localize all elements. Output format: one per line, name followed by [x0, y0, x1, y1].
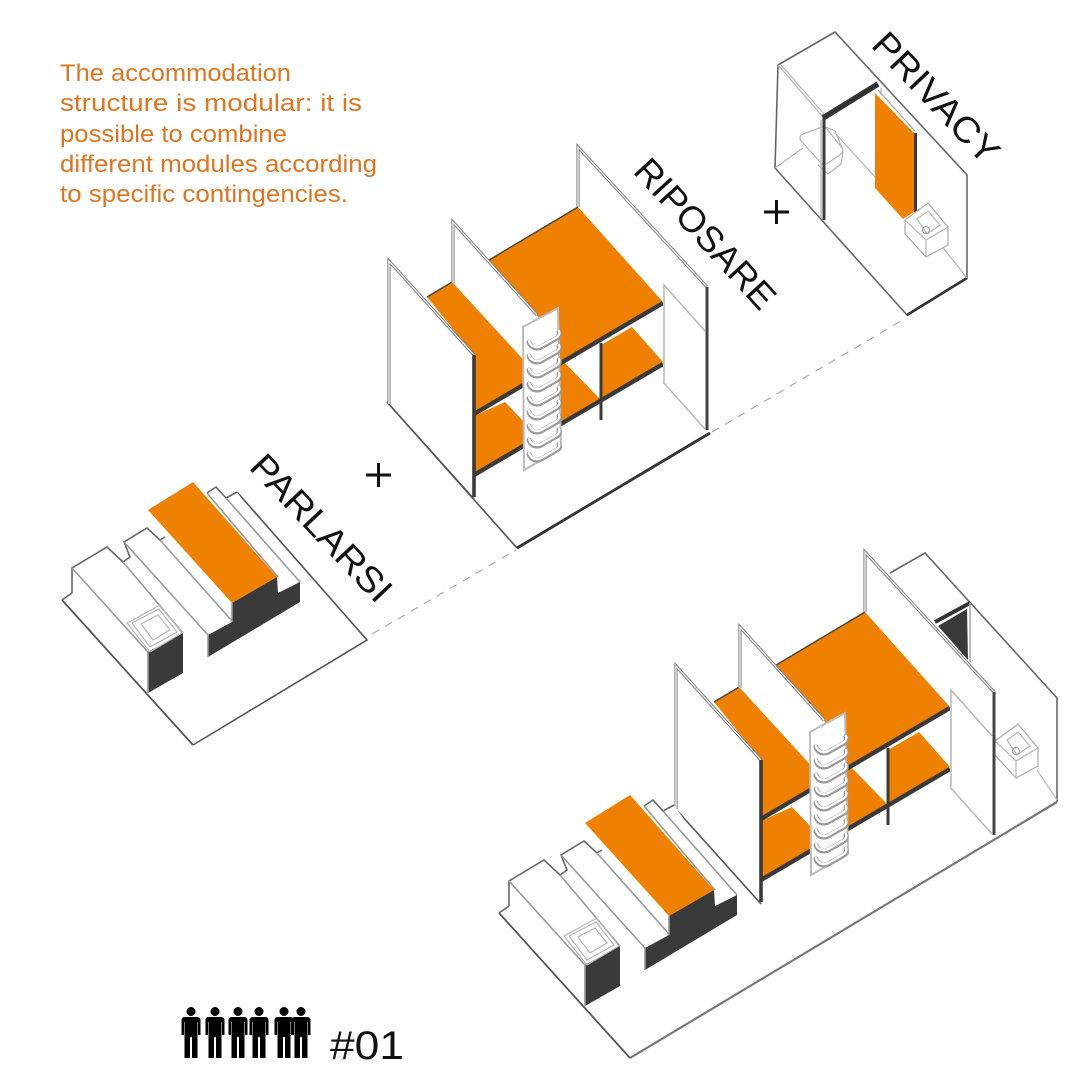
- silhouette outline: [62, 487, 237, 600]
- lower floor orange middle: [555, 363, 600, 426]
- label: privacy: PRIVACY: [864, 23, 1008, 172]
- riposare front floor edge: [517, 433, 710, 548]
- plus sign: parlarsi + riposare: [366, 463, 391, 487]
- dark sink block front: [148, 633, 183, 693]
- riposare left floor edge: [387, 402, 517, 548]
- dashed connector: riposare to privacy: [712, 318, 906, 432]
- back wall edge highlight: [578, 147, 707, 287]
- plus sign: riposare + privacy: [764, 200, 789, 224]
- combined front edge: [630, 802, 1057, 1058]
- intro text block: to specific contingencies.: [60, 181, 348, 208]
- label: #01: #01: [330, 1024, 404, 1068]
- combined sink: [995, 724, 1038, 778]
- base and silhouette: [62, 482, 300, 745]
- label: parlarsi: PARLARSI: [242, 445, 401, 610]
- icon: toilet: [800, 127, 843, 174]
- intro text block: The accommodation: [60, 60, 291, 87]
- combined door post: [969, 603, 971, 662]
- back wall: [578, 147, 707, 430]
- small right panel: [663, 285, 705, 430]
- upper floor orange: [427, 207, 663, 412]
- intro text block: structure is modular: it is: [60, 90, 362, 117]
- base left edge: [62, 600, 193, 745]
- middle post: [600, 343, 602, 420]
- combined module: [499, 552, 1057, 1058]
- left wall: [389, 261, 474, 497]
- middle wall: [453, 222, 540, 378]
- person 4: [250, 1007, 268, 1058]
- intro text block: different modules according: [60, 151, 377, 178]
- combined riposare: [674, 552, 994, 904]
- module: riposare body: [387, 147, 707, 499]
- middle wall edges: [453, 222, 537, 315]
- person 3: [228, 1007, 248, 1058]
- intro text block: [60, 60, 377, 208]
- intro text block: possible to combine: [60, 121, 287, 148]
- ladder: [523, 308, 561, 470]
- back wall dark end: [706, 287, 708, 430]
- privacy front floor edge: [907, 278, 967, 315]
- icon: kitchen sink: [127, 605, 182, 652]
- person 1: [182, 1007, 200, 1058]
- orange bench top: [148, 482, 277, 603]
- privacy orange partition: [875, 93, 914, 219]
- left wall edge highlight: [389, 261, 474, 404]
- left wall dark end: [472, 355, 476, 497]
- left wall bottom edge: [387, 402, 474, 499]
- lower floor orange right: [601, 327, 663, 398]
- upper beam: [474, 303, 663, 414]
- left wall top edges: [389, 261, 474, 404]
- ladder board: [523, 308, 561, 470]
- partition top edge: [878, 90, 915, 131]
- ladder rung highlights: [529, 331, 559, 459]
- partition dark edge: [914, 133, 917, 212]
- privacy door post shadow: [820, 120, 822, 218]
- person 2: [206, 1007, 224, 1058]
- privacy shell: [775, 32, 967, 315]
- combined privacy door dark opening: [938, 609, 968, 660]
- module: privacy: [775, 32, 967, 315]
- combined parlarsi: [499, 795, 737, 1058]
- step lines: [72, 493, 300, 652]
- combined privacy shell: [890, 553, 1057, 802]
- privacy interior lines: [775, 65, 967, 278]
- small right panel edges: [663, 285, 705, 429]
- module: parlarsi floor edges: [193, 492, 367, 745]
- person 6: [292, 1007, 310, 1058]
- dark bench front: [208, 577, 300, 657]
- upper floor back edge: [427, 207, 578, 297]
- icon: sink: [905, 203, 948, 257]
- vertical edges: [148, 603, 232, 693]
- module: riposare floor edges: [387, 402, 710, 548]
- lower floor orange left: [474, 402, 525, 474]
- label: riposare: RIPOSARE: [626, 150, 785, 317]
- back wall edges: [578, 147, 707, 287]
- lower beam: [474, 364, 663, 475]
- ladder rungs: [529, 332, 559, 460]
- icon: six people: [182, 1007, 310, 1058]
- person 5: [274, 1007, 294, 1058]
- combined door beam: [935, 603, 970, 622]
- module: parlarsi body: [62, 482, 300, 745]
- privacy door post: [822, 117, 826, 220]
- middle wall edge highlight: [453, 222, 537, 315]
- combined floor line: [1037, 770, 1057, 800]
- privacy door beam: [823, 84, 878, 118]
- dashed connector: parlarsi to riposare: [372, 550, 516, 634]
